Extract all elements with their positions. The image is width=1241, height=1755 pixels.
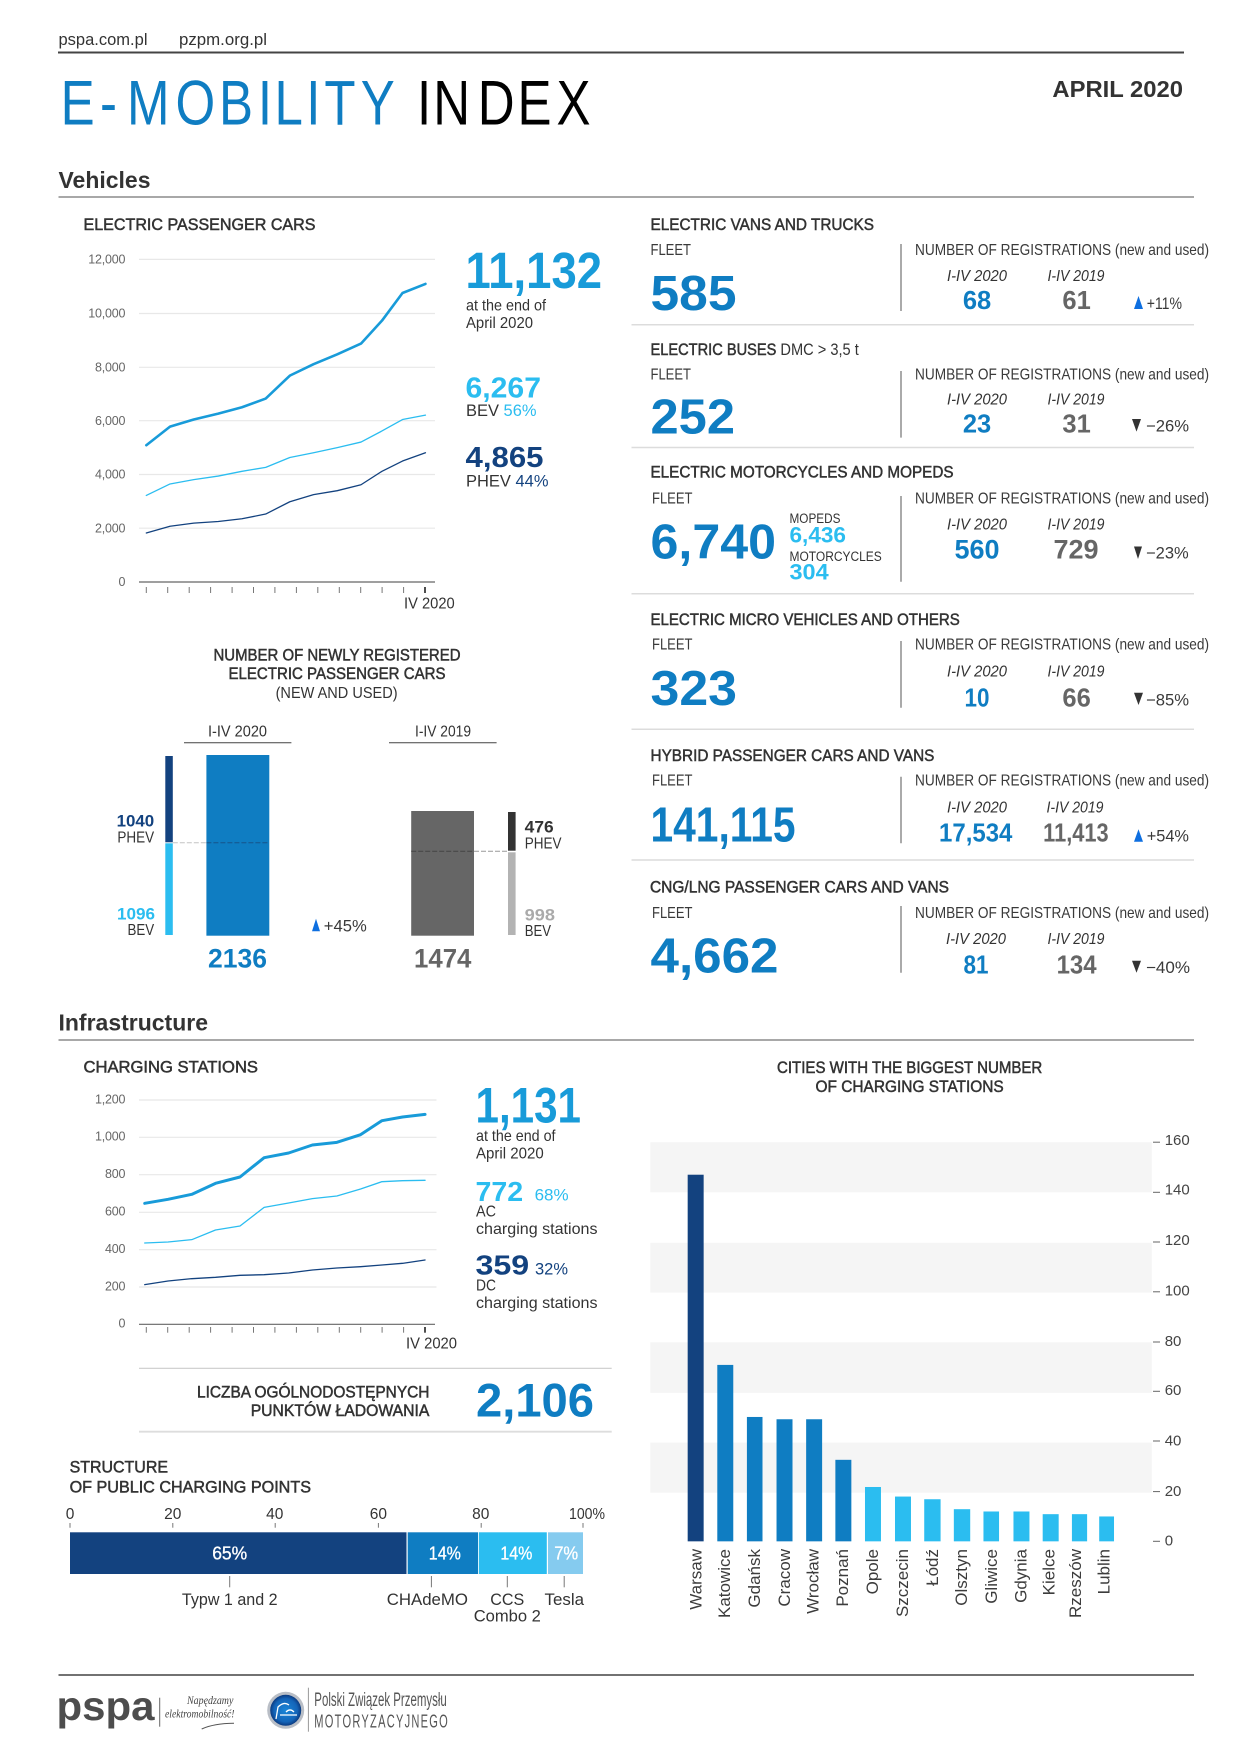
city labels: Gdańsk: [745, 1549, 764, 1608]
y axis: 20: [1165, 1483, 1181, 1500]
panel: motorcycles and mopeds: [650, 464, 1209, 585]
column: I-IV 2019: [389, 724, 562, 973]
city labels: Rzeszów: [1066, 1548, 1085, 1618]
column: I-IV 2019: 476: [525, 818, 554, 837]
line chart: electric passenger cars: [88, 252, 455, 612]
key figure: total cars: April 2020: [466, 315, 533, 332]
y axis: 80: [1165, 1333, 1181, 1350]
city labels: Łódź: [923, 1549, 942, 1586]
panel heading: [70, 1458, 311, 1496]
key figure: DC: 359: [476, 1250, 529, 1281]
panel: motorcycles and mopeds: I-IV 2020: [947, 516, 1007, 534]
callout: public charging points total: 2,106: [476, 1374, 594, 1427]
key figure: AC: [476, 1176, 598, 1238]
panel: CNG/LNG cars: 4,662: [650, 930, 778, 984]
column: I-IV 2020: PHEV: [117, 829, 154, 846]
line chart: electric passenger cars: 12,000: [88, 252, 126, 266]
panel: cities bar chart: [650, 1059, 1190, 1618]
logo: PZPM: MOTORYZACYJNEGO: [314, 1712, 448, 1732]
panel: motorcycles and mopeds: 6,436: [790, 522, 846, 548]
percent axis: 60: [370, 1506, 387, 1523]
column: I-IV 2019: 998: [525, 905, 555, 924]
stacked bar: [70, 1532, 583, 1574]
panel: buses: −26%: [1146, 418, 1189, 436]
panel heading: ELECTRIC PASSENGER CARS: [228, 665, 446, 683]
city labels: Szczecin: [893, 1549, 912, 1617]
logo: pspa: Napędzamy: [186, 1693, 234, 1707]
logo: pspa: [56, 1683, 234, 1729]
y axis: 120: [1165, 1232, 1190, 1249]
heading: Infrastructure: Infrastructure: [58, 1010, 208, 1036]
y axis: 140: [1165, 1182, 1190, 1199]
callout: public charging points total: [197, 1374, 594, 1427]
bar legend labels: CCS: [490, 1590, 524, 1609]
line chart: charging stations: 200: [105, 1279, 126, 1293]
panel: micro vehicles: 323: [650, 662, 737, 716]
panel: buses: [650, 341, 1209, 445]
panel: vans and trucks: FLEET: [650, 242, 691, 259]
panel: micro vehicles: 66: [1062, 684, 1091, 712]
key figure: PHEV: [466, 442, 548, 490]
key figure: AC: charging stations: [476, 1221, 598, 1238]
line chart: electric passenger cars: 6,000: [95, 414, 126, 428]
panel heading: CHARGING STATIONS: [84, 1059, 258, 1077]
percent axis: [66, 1506, 605, 1528]
y axis: 0: [1165, 1532, 1173, 1550]
panel: motorcycles and mopeds: MOPEDS: [790, 511, 840, 526]
line chart: electric passenger cars: IV 2020: [404, 596, 455, 612]
line chart: electric passenger cars: 10,000: [88, 307, 126, 321]
panel: hybrid cars: I-IV 2019: [1046, 799, 1104, 816]
y axis: 60: [1165, 1382, 1181, 1399]
y axis: 100: [1165, 1282, 1190, 1299]
city labels: Katowice: [715, 1549, 734, 1618]
city labels: Olsztyn: [952, 1549, 971, 1606]
key figure: total cars: [466, 242, 602, 332]
key figure: BEV: 6,267: [466, 372, 541, 404]
line chart: charging stations: 1,000: [95, 1130, 126, 1144]
panel: motorcycles and mopeds: FLEET: [652, 490, 693, 508]
city labels: Gliwice: [982, 1549, 1001, 1604]
panel heading: [214, 646, 461, 702]
logo: PZPM: [267, 1688, 448, 1732]
callout: public charging points total: PUNKTÓW ŁADOWANIA: [251, 1401, 429, 1420]
bar legend labels: Tesla: [544, 1590, 585, 1609]
panel: micro vehicles: 10: [964, 684, 990, 712]
header links: [58, 31, 267, 49]
stacked bar: 65%: [212, 1543, 247, 1563]
panel: hybrid cars: FLEET: [652, 772, 693, 789]
y axis: [1153, 1132, 1190, 1550]
panel: vans and trucks: 585: [650, 267, 736, 321]
key figure: BEV: BEV 56%: [466, 401, 536, 420]
panel: CNG/LNG cars: 134: [1057, 951, 1097, 979]
panel: CNG/LNG cars: I-IV 2020: [946, 931, 1006, 948]
column: I-IV 2020: [117, 724, 291, 973]
key figure: AC: 68%: [535, 1186, 569, 1205]
line chart: charging stations: 0: [119, 1317, 126, 1331]
panel: motorcycles and mopeds: ELECTRIC MOTORCYCLES AND MOPEDS: [650, 464, 954, 482]
column: I-IV 2020: 1040: [117, 813, 154, 831]
line chart: electric passenger cars: 0: [119, 575, 126, 589]
key figure: DC: DC: [476, 1277, 496, 1294]
percent axis: 20: [164, 1506, 182, 1523]
panel: buses: FLEET: [650, 367, 691, 384]
panel: vans and trucks: 61: [1062, 287, 1091, 315]
callout: public charging points total: LICZBA OGÓLNODOSTĘPNYCH: [197, 1383, 429, 1402]
column: I-IV 2019: BEV: [525, 923, 551, 940]
column: I-IV 2019: 1474: [414, 943, 471, 973]
bar legend labels: Combo 2: [474, 1607, 541, 1626]
panel heading: [777, 1059, 1042, 1096]
panel: motorcycles and mopeds: 560: [954, 534, 1000, 564]
panel: buses: 252: [650, 391, 735, 445]
panel heading: (NEW AND USED): [276, 685, 398, 702]
panel heading: NUMBER OF NEWLY REGISTERED: [214, 646, 461, 664]
panel: motorcycles and mopeds: 304: [790, 560, 830, 585]
panel: micro vehicles: −85%: [1146, 692, 1189, 710]
percent axis: 40: [266, 1506, 284, 1523]
panel: hybrid cars: 11,413: [1043, 820, 1109, 848]
y axis: 40: [1165, 1432, 1181, 1449]
title: E-MOBILITY: [61, 68, 395, 139]
title: [61, 68, 591, 139]
date: APRIL 2020: [1052, 76, 1183, 102]
city labels: Poznań: [833, 1549, 852, 1607]
panel: hybrid cars: [650, 747, 1209, 853]
panel: hybrid cars: 141,115: [650, 799, 796, 853]
panel: structure of public charging points: [66, 1458, 605, 1626]
bar legend labels: Typw 1 and 2: [182, 1590, 278, 1609]
stacked bar: 14%: [500, 1543, 532, 1563]
heading: Vehicles: Vehicles: [58, 167, 150, 193]
line chart: electric passenger cars: 4,000: [95, 468, 126, 482]
key figure: total stations: 1,131: [476, 1077, 581, 1133]
panel: hybrid cars: 17,534: [939, 820, 1013, 848]
panel: electric passenger cars: [84, 216, 602, 612]
panel: micro vehicles: ELECTRIC MICRO VEHICLES AND OTHERS: [650, 611, 960, 629]
percent axis: 80: [472, 1506, 490, 1523]
panel heading: OF CHARGING STATIONS: [816, 1078, 1004, 1096]
panel: motorcycles and mopeds: −23%: [1146, 545, 1189, 563]
logo: PZPM: Polski Związek Przemysłu: [314, 1690, 447, 1711]
panel: CNG/LNG cars: CNG/LNG PASSENGER CARS AND VANS: [650, 878, 949, 896]
key figure: AC: 772: [476, 1176, 523, 1207]
y axis: 160: [1165, 1132, 1190, 1149]
panel: buses: I-IV 2020: [947, 392, 1007, 409]
key figure: DC: 32%: [535, 1259, 568, 1278]
panel: CNG/LNG cars: FLEET: [652, 905, 693, 922]
panel: vans and trucks: ELECTRIC VANS AND TRUCKS: [650, 216, 874, 234]
line chart: charging stations: IV 2020: [406, 1336, 457, 1353]
column: I-IV 2020: BEV: [128, 922, 154, 939]
panel: vans and trucks: I-IV 2019: [1048, 268, 1105, 285]
line chart: charging stations: [95, 1092, 457, 1353]
panel: hybrid cars: I-IV 2020: [947, 799, 1007, 816]
column: I-IV 2020: I-IV 2020: [208, 724, 267, 741]
panel: hybrid cars: HYBRID PASSENGER CARS AND VANS: [650, 747, 934, 765]
column: I-IV 2020: 1096: [117, 905, 155, 923]
city labels: Lublin: [1094, 1549, 1113, 1594]
logo: pspa: elektromobilność!: [165, 1706, 234, 1720]
title: INDEX: [417, 68, 591, 139]
line chart: electric passenger cars: 2,000: [95, 521, 126, 535]
stacked bar: 7%: [554, 1543, 578, 1563]
city labels: [686, 1548, 1113, 1618]
panel: micro vehicles: FLEET: [652, 636, 693, 653]
panel: CNG/LNG cars: 81: [964, 951, 988, 979]
city labels: Kielce: [1039, 1549, 1058, 1595]
key figure: DC: [476, 1250, 598, 1312]
panel: motorcycles and mopeds: 729: [1053, 534, 1099, 564]
panel: buses: 23: [963, 410, 991, 438]
header links: pspa.com.pl: [58, 31, 148, 49]
panel: vans and trucks: I-IV 2020: [947, 268, 1007, 285]
panel: buses: 31: [1062, 410, 1091, 438]
bar legend labels: [182, 1576, 585, 1626]
city labels: Warsaw: [686, 1548, 705, 1610]
column: I-IV 2020: 2136: [208, 943, 267, 973]
panel heading: ELECTRIC PASSENGER CARS: [84, 216, 316, 234]
percent axis: 0: [66, 1506, 75, 1523]
key figure: PHEV: PHEV 44%: [466, 471, 548, 490]
city labels: Opole: [863, 1549, 882, 1594]
panel heading: CITIES WITH THE BIGGEST NUMBER: [777, 1059, 1042, 1077]
panel: vans and trucks: +11%: [1147, 295, 1182, 313]
key figure: total stations: [476, 1077, 581, 1163]
panel heading: STRUCTURE: [70, 1458, 168, 1476]
panel: hybrid cars: +54%: [1147, 828, 1189, 846]
panel: CNG/LNG cars: −40%: [1146, 959, 1190, 977]
background bands: [650, 1142, 1152, 1493]
percent axis: 100%: [569, 1506, 605, 1523]
bar legend labels: CHAdeMO: [387, 1590, 468, 1609]
panel: micro vehicles: [650, 611, 1209, 716]
key figure: BEV: [466, 372, 541, 420]
logo: pspa: pspa: [56, 1683, 156, 1729]
panel: charging stations: [84, 1059, 598, 1353]
panel: newly registered cars: [117, 646, 562, 973]
line chart: electric passenger cars: 8,000: [95, 360, 126, 374]
key figure: total stations: at the end of: [476, 1128, 556, 1145]
line chart: charging stations: 800: [105, 1167, 126, 1181]
panel: motorcycles and mopeds: 6,740: [650, 515, 776, 569]
column: I-IV 2019: I-IV 2019: [415, 724, 471, 741]
key figure: PHEV: 4,865: [466, 442, 544, 474]
panel: micro vehicles: I-IV 2020: [947, 664, 1007, 681]
stacked bar: 14%: [429, 1543, 461, 1563]
key figure: total stations: April 2020: [476, 1146, 544, 1163]
panel: buses: ELECTRIC BUSES DMC > 3,5 t: [650, 341, 859, 359]
line chart: charging stations: 400: [105, 1242, 126, 1256]
city labels: Gdynia: [1012, 1548, 1031, 1603]
city labels: Cracow: [775, 1548, 794, 1607]
key figure: AC: AC: [476, 1204, 496, 1221]
panel: micro vehicles: I-IV 2019: [1048, 664, 1105, 681]
column: I-IV 2019: PHEV: [525, 835, 562, 852]
panel: buses: I-IV 2019: [1048, 392, 1105, 409]
header links: pzpm.org.pl: [179, 31, 267, 49]
key figure: DC: charging stations: [476, 1295, 598, 1312]
panel: motorcycles and mopeds: MOTORCYCLES: [790, 549, 882, 564]
key figure: total cars: at the end of: [466, 298, 546, 314]
line chart: charging stations: 600: [105, 1205, 126, 1219]
panel: vans and trucks: 68: [963, 287, 991, 315]
panel: CNG/LNG cars: I-IV 2019: [1048, 931, 1105, 948]
city labels: Wrocław: [804, 1548, 823, 1614]
key figure: total cars: 11,132: [466, 242, 602, 299]
line chart: charging stations: 1,200: [95, 1092, 126, 1106]
panel: motorcycles and mopeds: I-IV 2019: [1048, 516, 1105, 534]
change indicator: +45%: +45%: [324, 917, 367, 935]
panel: vans and trucks: [650, 216, 1209, 321]
panel heading: OF PUBLIC CHARGING POINTS: [70, 1478, 311, 1496]
panel: CNG/LNG cars: [650, 878, 1209, 984]
bars: [688, 1175, 1114, 1541]
